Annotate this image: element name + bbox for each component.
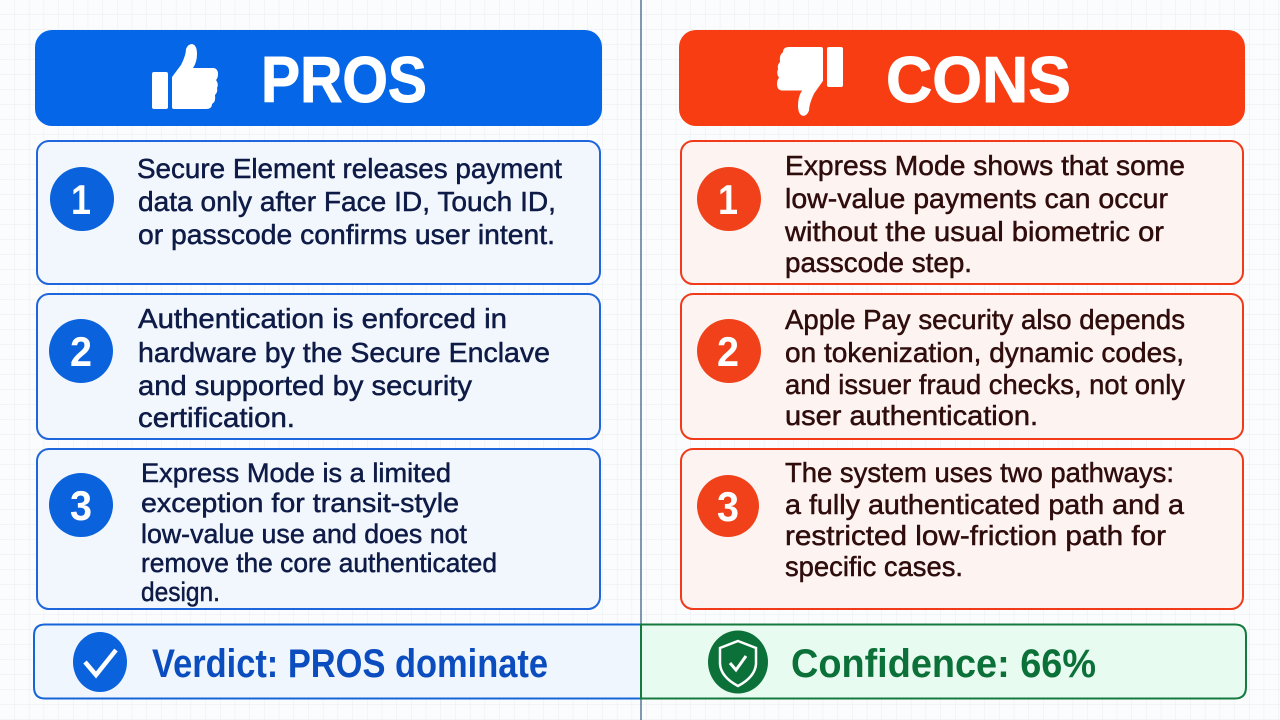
icon: number 3 (697, 475, 759, 537)
text: con point 1: Express Mode shows that some (785, 150, 1185, 181)
panel: con point 2 (681, 294, 1243, 439)
text: pro point 2: certification. (138, 402, 295, 433)
icon: number 3 (49, 473, 113, 537)
icon: number 3: 3 (717, 483, 739, 530)
text: con point 1 (784, 150, 1185, 278)
text: con point 1: without the usual biometric or (784, 216, 1164, 247)
panel: pro point 3 (37, 449, 600, 609)
text: con point 3: specific cases. (785, 551, 963, 582)
panel: con point 1 (681, 141, 1243, 284)
text: con point 2: Apple Pay security also depends (785, 304, 1185, 335)
text: pro point 2: and supported by security (138, 370, 472, 401)
text: con point 2: and issuer fraud checks, not only (785, 369, 1185, 400)
icon: number 1 (50, 167, 114, 231)
icon: shield check (708, 630, 768, 694)
panel: verdict (34, 624, 641, 698)
icon: number 1: 1 (718, 176, 738, 223)
text: pro point 3: design. (141, 577, 220, 607)
text: verdict: Verdict: PROS dominate (152, 642, 548, 686)
text: con point 2: on tokenization, dynamic codes, (785, 337, 1184, 368)
heading: CONS: CONS (886, 43, 1071, 116)
icon: number 2: 2 (717, 328, 739, 375)
text: pro point 1: data only after Face ID, Touch ID, (138, 186, 556, 217)
panel: con point 3 (681, 449, 1243, 609)
text: pro point 2: hardware by the Secure Enclave (138, 337, 550, 368)
icon: number 1 (697, 167, 761, 231)
icon: number 1: 1 (71, 176, 91, 223)
text: pro point 2 (138, 303, 550, 433)
panel: pro point 2 (37, 294, 600, 439)
icon: number 3: 3 (70, 482, 92, 529)
text: pro point 3: Express Mode is a limited (141, 458, 451, 488)
text: pro point 2: Authentication is enforced in (138, 303, 507, 334)
text: con point 2: user authentication. (785, 400, 1038, 431)
panel: cons header (679, 30, 1245, 126)
text: con point 3: restricted low-friction path for (785, 520, 1166, 551)
text: pro point 1 (137, 153, 562, 250)
text: pro point 1: Secure Element releases payment (137, 153, 562, 184)
heading: PROS: PROS (261, 43, 427, 116)
icon: number 2 (49, 319, 113, 383)
text: con point 2 (785, 304, 1185, 431)
panel: pros header (35, 30, 602, 126)
panel: pro point 1 (37, 141, 600, 284)
text: con point 1: passcode step. (785, 247, 972, 278)
icon: number 2: 2 (70, 328, 92, 375)
text: con point 1: low-value payments can occur (785, 183, 1168, 214)
icon: thumbs up (152, 44, 218, 109)
text: pro point 1: or passcode confirms user intent. (138, 219, 555, 250)
text: con point 3 (785, 457, 1184, 582)
icon: thumbs down (777, 47, 843, 116)
text: con point 3: The system uses two pathways: (785, 457, 1174, 488)
icon: number 2 (697, 319, 761, 383)
text: con point 3: a fully authenticated path and a (785, 489, 1184, 520)
text: pro point 3: low-value use and does not (141, 519, 467, 549)
text: pro point 3 (141, 458, 497, 607)
icon: check circle (73, 632, 127, 692)
text: pro point 3: remove the core authenticated (141, 548, 497, 578)
text: confidence: Confidence: 66% (791, 642, 1096, 686)
panel: confidence (641, 624, 1246, 698)
text: pro point 3: exception for transit-style (141, 488, 459, 518)
